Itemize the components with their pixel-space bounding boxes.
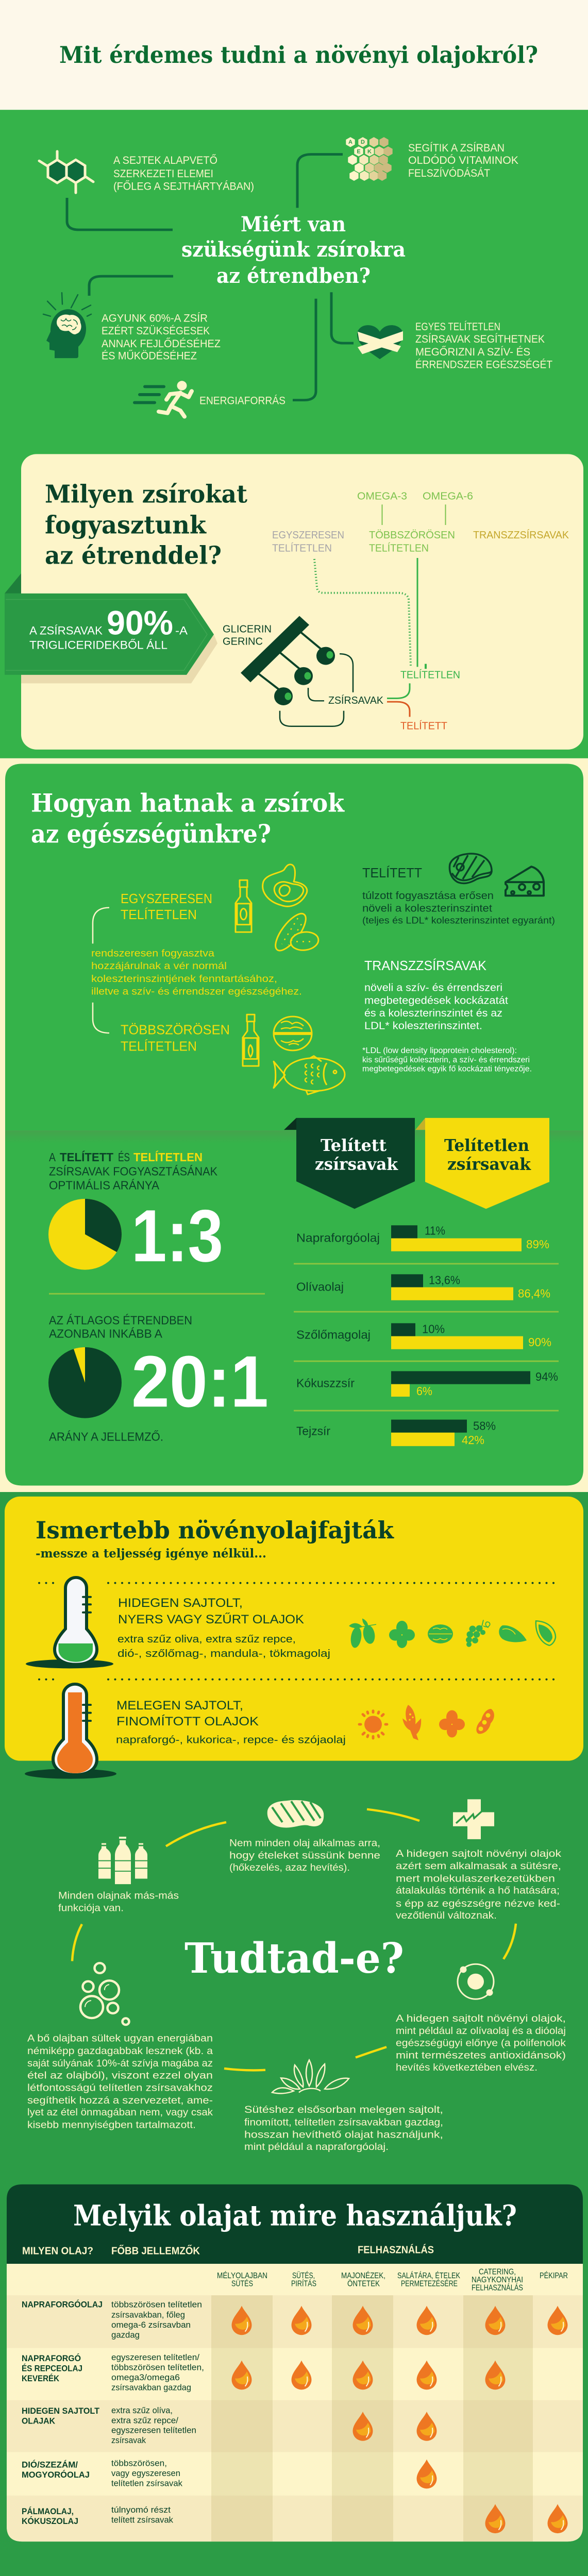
text: unsaturated types <box>121 891 230 1054</box>
background: cream middle <box>0 758 588 1492</box>
column headers <box>217 2268 568 2292</box>
row: cold pressed oils <box>22 2405 437 2445</box>
text: polyphenols: egészségügyi előnye (a polifenolok <box>396 2038 566 2048</box>
pie chart: 20 to 1 <box>48 1347 122 1418</box>
table header: FELHASZNÁLÁS <box>358 2244 434 2256</box>
table header: MILYEN OLAJ? <box>22 2245 93 2257</box>
text: polyphenols <box>396 2013 566 2073</box>
text: brain <box>102 312 221 362</box>
row: milk fat: 58% <box>473 1420 496 1433</box>
table stripes <box>7 2295 583 2541</box>
text: hot pressed <box>116 1699 346 1746</box>
text: polyphenols: mint például az olívaolaj és a dióolaj <box>396 2025 566 2037</box>
text: brain: AGYUNK 60%-A ZSÍR <box>102 312 208 324</box>
heading: health <box>31 788 345 849</box>
connectors <box>67 155 354 400</box>
icon: vitamins <box>346 137 393 181</box>
icon: vitamins: K <box>367 149 372 155</box>
icon: bottles <box>98 1837 148 1884</box>
icon: vitamins: E <box>357 149 361 155</box>
row: sunflower and rapeseed blend: zsírsavakban gazdag <box>111 2383 191 2392</box>
diagram: triglyceride molecule: GERINC <box>223 636 263 648</box>
panel: did you know <box>27 1799 566 2153</box>
table header: FŐBB JELLEMZŐK <box>111 2245 200 2257</box>
row: palm and coconut oil <box>22 2504 568 2533</box>
text: unsaturated description: hozzájárulnak a vér normál <box>91 960 227 972</box>
text: frying in plenty of oil: kisebb mennyiségben tartalmazott. <box>27 2120 196 2130</box>
row: olive: 86,4% <box>518 1287 550 1300</box>
text: frying in plenty of oil: étel az olajból), viszont ezzel olyan <box>27 2070 213 2081</box>
heading: what fats <box>45 480 248 570</box>
text: trans fats <box>364 958 508 1031</box>
row: sunflower and rapeseed blend: KEVERÉK <box>22 2374 59 2383</box>
row: palm and coconut oil: túlnyomó részt <box>111 2505 171 2515</box>
heading: health: az egészségünkre? <box>31 819 271 849</box>
heading: why fats <box>181 212 406 288</box>
bar chart: oils <box>294 1225 559 1447</box>
text: not every oil <box>229 1838 380 1873</box>
row: walnut sesame hazelnut oil: MOGYORÓOLAJ <box>22 2470 90 2480</box>
heading: what fats: az étrenddel? <box>45 541 222 570</box>
footnote: LDL: kis sűrűségű koleszterin, a szív- és érrendszeri <box>362 1056 530 1064</box>
pie chart: 1 to 3 <box>48 1199 122 1270</box>
text: not every oil: (hőkezelés, azaz hevítés). <box>229 1862 350 1873</box>
text: frying recommendation <box>244 2104 443 2153</box>
text: cold pressed: HIDEGEN SAJTOLT, <box>118 1596 243 1610</box>
text: polyphenols: hevítés következtében elvész. <box>396 2062 537 2073</box>
text: unsaturated types: TÖBBSZÖRÖSEN <box>121 1022 230 1037</box>
row: walnut sesame hazelnut oil: telítetlen zsírsavak <box>111 2479 183 2488</box>
row: olive: Olívaolaj <box>296 1281 344 1294</box>
text: not every oil: Nem minden olaj alkalmas arra, <box>229 1838 380 1849</box>
icon: steak outline <box>449 854 492 884</box>
text: trans fats: megbetegedések kockázatát <box>364 995 508 1006</box>
column headers: SALÁTÁRA, ÉTELEK <box>397 2270 460 2280</box>
icon: broken cross <box>453 1799 494 1839</box>
background: dark green lower <box>0 1492 588 2576</box>
ratio: 20:1: 20:1 <box>131 1341 268 1422</box>
text: unsaturated types: TELÍTETLEN <box>121 1039 197 1054</box>
table header <box>22 2244 434 2257</box>
row: grapeseed: 10% <box>422 1323 445 1336</box>
banner: 90 percent: 90% <box>107 604 173 642</box>
column headers: PIRÍTÁS <box>291 2279 316 2289</box>
banner: 90 percent <box>5 573 217 683</box>
text: optimal ratio: ZSÍRSAVAK FOGYASZTÁSÁNAK <box>49 1165 217 1178</box>
row: grapeseed: Szőlőmagolaj <box>296 1329 371 1342</box>
diagram: triglyceride molecule: ZSÍRSAVAK <box>328 694 383 706</box>
text: cold pressed: extra szűz oliva, extra szűz repce, <box>117 1633 296 1645</box>
text: heart: MEGŐRIZNI A SZÍV- ÉS <box>415 345 530 358</box>
column headers: PÉKIPAR <box>540 2270 568 2280</box>
icon: molecule <box>39 151 93 193</box>
diagram: fat type tree: TÖBBSZÖRÖSEN <box>369 529 455 541</box>
icon: hot thermometer <box>25 1684 116 1779</box>
text: unsaturated description: koleszterinszintjének fenntartásához, <box>91 973 277 985</box>
icons: monounsaturated foods <box>236 865 320 955</box>
panel: how fats affect health <box>5 764 583 1130</box>
banner: 90 percent: A ZSÍRSAVAK <box>29 624 103 637</box>
row: coconut <box>296 1370 558 1398</box>
row: sunflower oil: NAPRAFORGÓOLAJ <box>22 2300 103 2309</box>
text: frying in plenty of oil <box>27 2033 213 2130</box>
row: milk fat: 42% <box>462 1434 484 1447</box>
text: brain: ÉS MŰKÖDÉSÉHEZ <box>102 349 197 362</box>
heading: why fats: szükségünk zsírokra <box>181 237 406 262</box>
ribbon: unsaturated <box>415 1118 549 1209</box>
ribbon: unsaturated: Telítetlen <box>444 1135 529 1155</box>
ribbon: saturated <box>284 1118 415 1209</box>
text: unsaturated description <box>91 948 302 997</box>
text: cold pressed change: s épp az egészségre nézve ked- <box>396 1898 560 1909</box>
row: sunflower oil: gazdag <box>111 2330 140 2340</box>
row: milk fat: Tejzsír <box>296 1425 330 1438</box>
text: vitamins: SEGÍTIK A ZSÍRBAN <box>408 141 505 154</box>
banner: 90 percent: TRIGLICERIDEKBŐL ÁLL <box>29 638 167 651</box>
heading: why fats: az étrendben? <box>216 263 371 288</box>
text: vitamins: FELSZÍVÓDÁSÁT <box>408 167 490 179</box>
row: sunflower oil <box>22 2300 568 2340</box>
heading: why fats: Miért van <box>241 212 346 236</box>
text: optimal ratio: A <box>49 1151 56 1164</box>
text: frying recommendation: mint például a napraforgóolaj. <box>244 2141 389 2153</box>
text: brain: EZÉRT SZÜKSÉGESEK <box>102 324 210 337</box>
row: cold pressed oils: HIDEGEN SAJTOLT <box>22 2406 100 2416</box>
text: cold pressed change: vezőtlenül változnak. <box>396 1910 497 1921</box>
diagram: fat type tree: EGYSZERESEN <box>272 529 344 541</box>
row: sunflower: 11% <box>425 1225 445 1238</box>
text: energy: ENERGIAFORRÁS <box>199 394 285 406</box>
text: unsaturated types: EGYSZERESEN <box>121 891 212 906</box>
text: frying in plenty of oil: saját súlyának 10%-át szívja magába az <box>27 2058 213 2069</box>
row: walnut sesame hazelnut oil: DIÓ/SZEZÁM/ <box>22 2460 78 2470</box>
text: cell structure: (FŐLEG A SEJTHÁRTYÁBAN) <box>113 180 254 192</box>
row: sunflower and rapeseed blend: NAPRAFORGÓ <box>22 2353 81 2363</box>
ribbon: saturated: zsírsavak <box>315 1154 398 1174</box>
diagram: fat type tree: OMEGA-3 <box>357 490 407 502</box>
row: palm and coconut oil: KÓKUSZOLAJ <box>22 2516 78 2526</box>
panel: why we need fats <box>39 137 552 417</box>
heading: which oil: Melyik olajat mire használjuk? <box>73 2199 517 2232</box>
text: trans fats: növeli a szív- és érrendszeri <box>364 982 502 994</box>
heading: did you know: Tudtad-e? <box>184 1934 404 1982</box>
row: sunflower and rapeseed blend: egyszeresen telítetlen/ <box>111 2352 199 2362</box>
text: cell structure: SZERKEZETI ELEMEI <box>113 167 213 180</box>
text: heart: ZSÍRSAVAK SEGÍTHETNEK <box>415 332 545 345</box>
text: hot pressed: MELEGEN SAJTOLT, <box>116 1699 243 1713</box>
row: sunflower and rapeseed blend: omega3/omega6 <box>111 2372 180 2382</box>
row: cold pressed oils: extra szűz repce/ <box>111 2416 178 2425</box>
text: saturated heading: TELÍTETT <box>362 865 422 880</box>
icons: cold pressed plants <box>349 1618 556 1649</box>
icon: plant <box>272 2060 349 2093</box>
diagram: fat type tree: TELÍTETLEN <box>272 543 332 554</box>
row: sunflower: 89% <box>526 1238 549 1251</box>
column headers: MÉLYOLAJBAN <box>217 2270 267 2280</box>
text: average diet: AZONBAN INKÁBB A <box>49 1327 162 1341</box>
row: grapeseed <box>296 1323 551 1349</box>
banner: 90 percent: -A <box>175 624 188 637</box>
icon: head with brain <box>43 293 91 358</box>
row: cold pressed oils: extra szűz olíva, <box>111 2405 173 2415</box>
diagram: fat type tree <box>272 490 569 732</box>
text: brain: ANNAK FEJLŐDÉSÉHEZ <box>102 337 221 350</box>
text: optimal ratio <box>49 1150 217 1192</box>
footnote: LDL: megbetegedések egyik fő kockázati tényezője. <box>362 1065 532 1074</box>
row: walnut sesame hazelnut oil: vagy egyszeresen <box>111 2468 180 2478</box>
column headers: PERMETEZÉSÉRE <box>401 2279 458 2289</box>
row: grapeseed: 90% <box>528 1336 551 1349</box>
row: coconut: 6% <box>416 1385 432 1398</box>
panel: ratios and fat composition <box>5 1118 583 1485</box>
column headers: NAGYKONYHAI <box>472 2276 523 2284</box>
row: palm and coconut oil: PÁLMAOLAJ, <box>22 2506 74 2516</box>
text: cold pressed change: A hidegen sajtolt növényi olajok <box>396 1848 561 1859</box>
heading: oil types: Ismertebb növényolajfajták <box>36 1517 394 1544</box>
column headers: MAJONÉZEK, <box>341 2270 385 2280</box>
row: sunflower oil: omega-6 zsírsavban <box>111 2320 191 2330</box>
text: unsaturated description: illetve a szív- és érrendszer egészségéhez. <box>91 986 302 997</box>
row: cold pressed oils: OLAJAK <box>22 2416 55 2426</box>
subheading: -messze a teljesség igénye nélkül... <box>36 1546 266 1561</box>
text: cell structure: A SEJTEK ALAPVETŐ <box>113 154 217 166</box>
text: polyphenols: mint természetes antioxidánsok) <box>396 2050 566 2061</box>
text: frying recommendation: Sütéshez elsősorban melegen sajtolt, <box>244 2104 443 2115</box>
text: unsaturated types: TELÍTETLEN <box>121 907 197 922</box>
icon: vitamins: D <box>361 139 365 145</box>
row: walnut sesame hazelnut oil: többszörösen, <box>111 2459 167 2468</box>
row: sunflower and rapeseed blend: többszörösen telítetlen, <box>111 2363 204 2372</box>
text: hot pressed: napraforgó-, kukorica-, repce- és szójaolaj <box>116 1734 346 1746</box>
row: sunflower oil: zsírsavakban, főleg <box>111 2310 185 2320</box>
ratio: 1:3: 1:3 <box>131 1194 223 1277</box>
text: unsaturated description: rendszeresen fogyasztva <box>91 948 214 959</box>
icons: polyunsaturated foods <box>243 1014 345 1094</box>
panel: oil types <box>5 1497 583 1779</box>
column headers: FELHASZNÁLÁS <box>472 2283 523 2292</box>
row: sunflower and rapeseed blend <box>22 2352 505 2392</box>
text: polyphenols: A hidegen sajtolt növényi olajok, <box>396 2013 566 2024</box>
text: cold pressed change: átalakulás történik a hő hatására; <box>396 1885 560 1896</box>
row: sunflower <box>296 1225 549 1251</box>
text: frying in plenty of oil: segíthetik hozzá a szervezetet, ame- <box>27 2095 213 2106</box>
row: coconut: 94% <box>535 1370 558 1384</box>
text: cold pressed change: mert molekulaszerkezetükben <box>396 1873 555 1884</box>
text: cold pressed change <box>396 1848 561 1921</box>
heading: health: Hogyan hatnak a zsírok <box>31 788 345 818</box>
icon: bandaged heart <box>357 325 403 359</box>
icon: cold thermometer <box>26 1578 113 1668</box>
text: typical ratio: ARÁNY A JELLEMZŐ. <box>49 1430 163 1444</box>
text: heart: ÉRRENDSZER EGÉSZSÉGÉT <box>415 358 552 370</box>
title: Mit érdemes tudni a növényi olajokról? <box>59 41 538 69</box>
text: cold pressed: NYERS VAGY SZŰRT OLAJOK <box>118 1613 305 1626</box>
row: olive: 13,6% <box>429 1274 460 1287</box>
row: sunflower: Napraforgóolaj <box>296 1232 380 1245</box>
text: every oil <box>58 1890 179 1913</box>
diagram: fat type tree: TELÍTETLEN <box>369 543 429 554</box>
text: saturated description: (teljes és LDL* koleszterinszintet egyaránt) <box>362 915 555 926</box>
ribbon: saturated: Telített <box>321 1135 387 1155</box>
background: header cream <box>0 0 588 110</box>
diagram: fat type tree: TRANSZZSÍRSAVAK <box>473 529 569 541</box>
icon: vitamins: A <box>348 139 352 145</box>
diagram: triglyceride molecule <box>223 616 383 726</box>
text: trans fats: TRANSZZSÍRSAVAK <box>364 958 486 973</box>
text: optimal ratio: OPTIMÁLIS ARÁNYA <box>49 1179 159 1192</box>
heading: what fats: fogyasztunk <box>45 511 207 539</box>
text: every oil: Minden olajnak más-más <box>58 1890 179 1901</box>
text: frying in plenty of oil: A bő olajban sültek ugyan energiában <box>27 2033 213 2044</box>
column headers: SÜTÉS <box>231 2279 253 2289</box>
row: palm and coconut oil: telített zsírsavak <box>111 2515 174 2524</box>
footnote: LDL <box>362 1046 532 1074</box>
row: walnut sesame hazelnut oil <box>22 2459 437 2488</box>
text: cold pressed: dió-, szőlőmag-, mandula-, tökmagolaj <box>117 1648 330 1659</box>
text: not every oil: hogy ételeket süssünk benne <box>229 1850 380 1861</box>
icon: runner <box>135 381 192 417</box>
column headers: SÜTÉS, <box>292 2270 315 2280</box>
row: sunflower and rapeseed blend: ÉS REPCEOLAJ <box>22 2364 82 2373</box>
text: frying recommendation: hosszan hevíthető olajat használjunk, <box>244 2129 443 2141</box>
footnote: LDL: *LDL (low density lipoprotein cholesterol): <box>362 1046 517 1055</box>
ribbon: unsaturated: zsírsavak <box>447 1154 531 1174</box>
text: vitamins: OLDÓDÓ VITAMINOK <box>408 154 519 166</box>
text: frying in plenty of oil: némiképp gazdagabbak lesznek (kb. a <box>27 2045 213 2057</box>
row: olive <box>296 1274 550 1300</box>
text: heart <box>415 320 552 370</box>
text: average diet <box>49 1314 192 1341</box>
text: frying recommendation: finomított, telítetlen zsírsavakban gazdag, <box>244 2117 443 2128</box>
text: optimal ratio: TELÍTETT <box>60 1150 114 1164</box>
icon: steak <box>267 1800 324 1827</box>
text: trans fats: és a koleszterinszintet és az <box>364 1007 502 1019</box>
icon: bubbles <box>80 1963 129 2025</box>
row: coconut: Kókuszzsír <box>296 1377 355 1390</box>
text: trans fats: LDL* koleszterinszintet. <box>364 1020 482 1031</box>
text: cold pressed change: azért sem alkalmasak a sütésre, <box>396 1860 561 1872</box>
panel: what fats we eat <box>5 454 583 750</box>
text: average diet: AZ ÁTLAGOS ÉTRENDBEN <box>49 1314 192 1327</box>
text: saturated description: növeli a koleszterinszintet <box>362 903 492 914</box>
icon: atom <box>458 1964 494 1999</box>
icons: hot pressed plants <box>359 1705 494 1740</box>
text: frying in plenty of oil: létfontosságú telítetlen zsírsavakhoz <box>27 2082 213 2093</box>
row: cold pressed oils: egyszeresen telítetlen <box>111 2426 196 2435</box>
column headers: ÖNTETEK <box>347 2279 380 2289</box>
background: green upper <box>0 110 588 758</box>
diagram: triglyceride molecule: GLICERIN <box>223 623 272 635</box>
arcs <box>72 1809 516 2070</box>
panel: which oil for what <box>7 2184 583 2541</box>
text: every oil: funkciója van. <box>58 1903 124 1913</box>
diagram: fat type tree: TELÍTETT <box>400 720 447 732</box>
row: cold pressed oils: zsírsavak <box>111 2435 146 2445</box>
text: optimal ratio: ÉS <box>118 1151 130 1164</box>
text: hot pressed: FINOMÍTOTT OLAJOK <box>116 1715 259 1728</box>
text: cell structure <box>113 154 254 192</box>
row: sunflower oil: többszörösen telítetlen <box>111 2300 202 2309</box>
text: frying in plenty of oil: lyet az étel önmagában nem, vagy csak <box>27 2107 213 2118</box>
text: cold pressed <box>117 1596 330 1659</box>
row: milk fat <box>296 1419 496 1447</box>
text: saturated description: túlzott fogyasztása erősen <box>362 890 494 902</box>
bracket lines <box>93 908 109 1033</box>
text: optimal ratio: TELÍTETLEN <box>133 1150 203 1164</box>
text: vitamins <box>408 141 519 179</box>
heading: what fats: Milyen zsírokat <box>45 480 248 509</box>
icon: cheese <box>506 867 544 895</box>
text: saturated description <box>362 890 555 926</box>
text: heart: EGYES TELÍTETLEN <box>415 320 500 333</box>
diagram: fat type tree: OMEGA-6 <box>423 490 473 502</box>
column headers: CATERING, <box>479 2268 516 2276</box>
diagram: fat type tree: TELÍTETLEN <box>400 669 460 681</box>
